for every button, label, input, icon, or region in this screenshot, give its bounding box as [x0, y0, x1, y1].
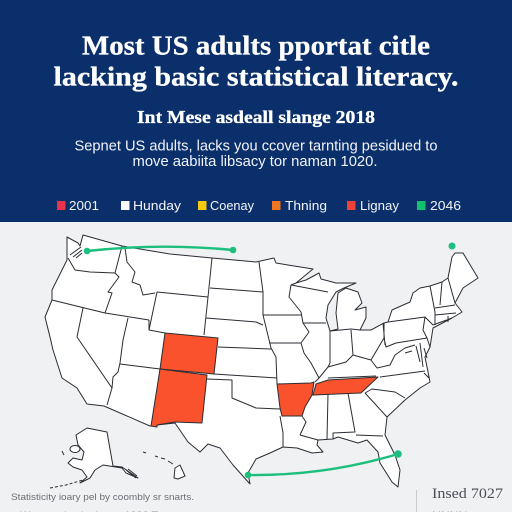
title: [54, 30, 458, 92]
subtitle: Int Mese asdeall slange 2018: [137, 107, 375, 127]
map caption: Statisticity ioary pel by coombly sr snarts.: [11, 492, 194, 503]
footer stamp: Insed 7027: [432, 486, 504, 502]
title: lacking basic statistical literacy.: [54, 62, 458, 92]
state: Tennessee: [313, 377, 378, 395]
state borders: [52, 246, 456, 447]
header panel: [0, 0, 512, 222]
legend: [57, 198, 461, 213]
state: New Mexico: [151, 369, 207, 427]
Hawaii: [143, 452, 185, 479]
state: Arkansas: [277, 382, 314, 416]
legend: Lignay: [360, 198, 400, 213]
legend: Hunday: [133, 198, 182, 213]
legend: Thning: [285, 198, 327, 213]
state: Colorado: [160, 333, 218, 374]
legend: 2046: [430, 198, 461, 213]
legend: 2001: [69, 198, 99, 213]
description text: move aabiita libsacy tor naman 1020.: [132, 154, 378, 170]
footer stamp: [416, 486, 504, 512]
description text: [74, 138, 438, 170]
title: Most US adults pportat citle: [82, 30, 430, 60]
Alaska: [50, 428, 138, 488]
description text: Sepnet US adults, lacks you ccover tarnting pesidued to: [74, 138, 438, 154]
green route: gulf: [245, 450, 402, 478]
green marker: northeast: [448, 242, 456, 250]
green route: northwest: [84, 247, 236, 254]
contiguous states outline: [45, 235, 478, 487]
US map: [45, 235, 478, 488]
legend: Coenay: [210, 198, 254, 213]
Puget Sound hatching: [70, 247, 82, 258]
